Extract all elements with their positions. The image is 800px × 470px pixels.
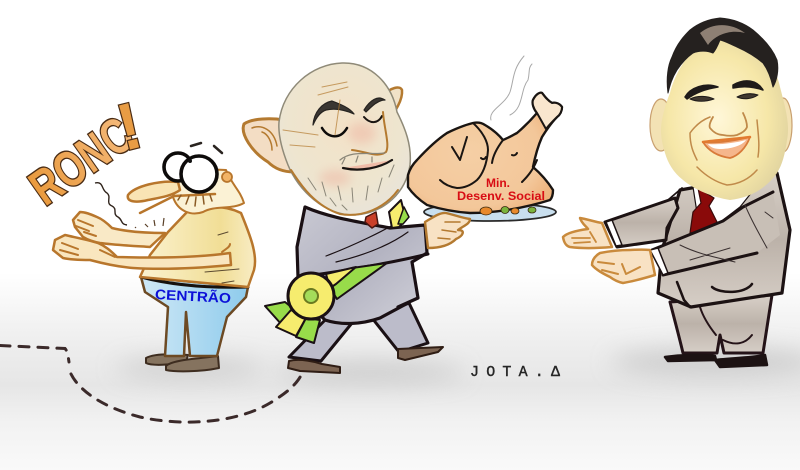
sash upper: [389, 200, 406, 228]
nose: [128, 182, 180, 202]
brows: [685, 81, 763, 99]
sleeve: [326, 222, 408, 262]
garnish: [480, 206, 536, 215]
head: [279, 63, 410, 215]
plate: [424, 203, 556, 221]
character: Lula: [243, 56, 562, 373]
lapel: [665, 188, 682, 235]
mouth: [343, 160, 392, 170]
teeth: [708, 140, 746, 149]
tie: [690, 188, 717, 233]
character: Centrão: [53, 143, 255, 371]
waistband: [141, 277, 248, 287]
suit: [297, 207, 427, 324]
shoes: [665, 355, 767, 367]
onomatopoeia: RONC!: !: [109, 87, 149, 165]
brows: [191, 143, 222, 153]
sash lower: [328, 263, 387, 299]
closed eye right: [364, 116, 382, 122]
jeans: [141, 277, 248, 356]
mouth line: [140, 194, 215, 213]
shoes: [146, 354, 219, 371]
sleeve edge: [298, 254, 428, 277]
near arm: [53, 235, 231, 269]
front shoe: [398, 347, 443, 360]
steam: [491, 56, 532, 120]
brows: [313, 98, 385, 125]
nose: [710, 113, 747, 136]
bone: [533, 93, 562, 129]
ground shadows: [115, 349, 800, 382]
pupils: [188, 159, 192, 163]
ear inner: [252, 127, 277, 150]
jacket: [658, 173, 790, 307]
signature: JOTA.Δ: [470, 364, 565, 381]
trousers: [670, 295, 772, 353]
eyes: [690, 94, 758, 101]
left ear: [243, 119, 294, 172]
beard strokes: [308, 165, 394, 210]
closed eye left: [322, 128, 347, 136]
turkey: [408, 93, 562, 213]
hair highlight: [700, 25, 745, 45]
upper lip: [703, 137, 750, 142]
upper arm: [605, 198, 678, 247]
lower hand: [592, 250, 655, 283]
rosette centre: [304, 289, 318, 303]
upper hand fingers: [572, 232, 596, 243]
ear: [222, 172, 232, 182]
turkey crease: [440, 123, 537, 188]
moustache: [340, 153, 385, 164]
far hand fingers: [76, 220, 96, 236]
left ear: [650, 99, 672, 151]
back shoe: [288, 360, 340, 373]
trouser crease: [700, 307, 752, 343]
hair: [667, 18, 778, 93]
back leg: [289, 318, 352, 361]
character: Wellington: [563, 18, 792, 367]
chest fold: [205, 232, 239, 283]
plate hand fingers: [438, 222, 460, 239]
forehead lines: [283, 82, 348, 147]
far arm: [73, 212, 165, 247]
upper hand: [563, 218, 612, 248]
face: [173, 168, 244, 213]
label: Min. Desenv. Social: Min.: [486, 176, 510, 190]
smile: [703, 137, 750, 158]
lower arm top edge: [652, 192, 773, 250]
lower arm fill: [652, 192, 780, 275]
lower arm bottom edge: [663, 253, 757, 275]
face creases: [690, 117, 759, 185]
beard outline: [291, 170, 398, 215]
pocket: [712, 284, 752, 292]
head: [661, 36, 788, 200]
label: CENTRÃO: CENTRÃO: [155, 285, 232, 306]
torso: [140, 207, 255, 287]
near hand fingers: [60, 243, 115, 257]
jacket bottom line: [677, 282, 690, 307]
blush left: [319, 170, 351, 186]
tie: [365, 212, 378, 228]
front leg: [372, 303, 428, 352]
nose: [352, 112, 387, 155]
sash tails: [265, 302, 295, 325]
glasses: [164, 153, 217, 192]
blush right: [348, 122, 376, 144]
cuff: [606, 220, 622, 246]
dashed trail: [0, 346, 304, 422]
lower cuff: [650, 248, 668, 275]
label: Min. Desenv. Social: Desenv. Social: [457, 189, 545, 203]
hand holding plate: [425, 213, 470, 248]
elbow fold: [222, 244, 230, 252]
right ear: [384, 88, 402, 120]
moustache: [178, 195, 212, 206]
lower hand fingers: [598, 262, 640, 274]
stomach rumble squiggle: [95, 183, 127, 225]
shirt: [693, 187, 752, 232]
right ear: [774, 98, 792, 152]
rosette: [288, 273, 334, 319]
sleeve folds: [680, 205, 773, 262]
onomatopoeia: RONC!: RONC: [19, 106, 143, 216]
